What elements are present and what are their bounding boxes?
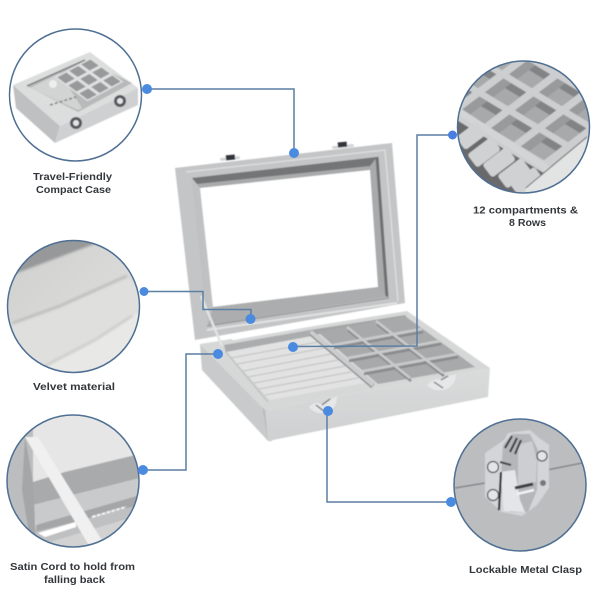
case base bbox=[200, 309, 490, 441]
panel: satin cord bbox=[0, 415, 140, 586]
caption: Satin Cord to hold from bbox=[10, 561, 135, 573]
compartments tray bbox=[311, 316, 475, 386]
caption: Travel-Friendly bbox=[33, 171, 112, 183]
connector: compact case to lid top bbox=[142, 84, 299, 158]
connector: clasp to metal clasp zoom bbox=[323, 406, 456, 507]
panel: velvet material bbox=[5, 235, 145, 393]
caption: 12 compartments & bbox=[473, 204, 578, 216]
caption bbox=[473, 204, 578, 229]
zoom circle: compact closed case bbox=[12, 52, 138, 144]
caption: Velvet material bbox=[33, 381, 115, 393]
caption: falling back bbox=[44, 574, 105, 586]
connector: compartments to tray bbox=[288, 130, 457, 352]
zoom circle: velvet ridges bbox=[8, 241, 139, 372]
panel: 12 compartments and 8 rows bbox=[456, 60, 590, 226]
caption bbox=[10, 561, 135, 586]
caption: 8 Rows bbox=[509, 217, 546, 229]
case lid bbox=[175, 143, 405, 340]
ring rows bbox=[226, 336, 365, 402]
satin cord bbox=[201, 296, 222, 346]
zoom circle: satin cord detail bbox=[8, 416, 138, 546]
caption: Lockable Metal Clasp bbox=[469, 564, 582, 576]
panel: travel-friendly compact case bbox=[10, 29, 142, 196]
connector: satin cord to case hinge bbox=[138, 349, 223, 475]
zoom circle: metal clasp close-up bbox=[454, 419, 586, 551]
panel: lockable metal clasp bbox=[454, 419, 586, 576]
lid clasp plates bbox=[220, 142, 354, 161]
caption bbox=[33, 171, 112, 196]
panel: jewelry case main photo bbox=[175, 142, 490, 441]
zoom circle: compartments close-up bbox=[458, 62, 589, 192]
caption: Compact Case bbox=[36, 184, 111, 196]
connector: velvet material to lid bbox=[140, 287, 256, 324]
front metal clasps bbox=[309, 374, 456, 413]
